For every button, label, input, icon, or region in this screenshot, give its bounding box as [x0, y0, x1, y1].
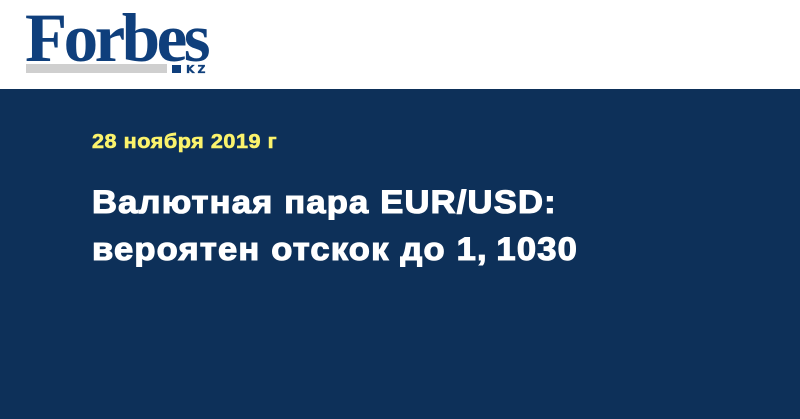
- header: white band with logo: [0, 0, 800, 89]
- title: [92, 184, 578, 267]
- title: Валютная пара EUR/USD:: [92, 184, 557, 220]
- logo: blue square: [172, 65, 181, 73]
- title: вероятен отскок до 1, 1030: [92, 231, 578, 267]
- logo: KZ label: KZ: [186, 63, 208, 76]
- logo: Forbes wordmark: Forbes: [25, 0, 207, 76]
- panel: dark blue background: [0, 89, 800, 419]
- date: 28 ноября 2019 г: [92, 131, 277, 153]
- logo: grey bar: [26, 64, 167, 73]
